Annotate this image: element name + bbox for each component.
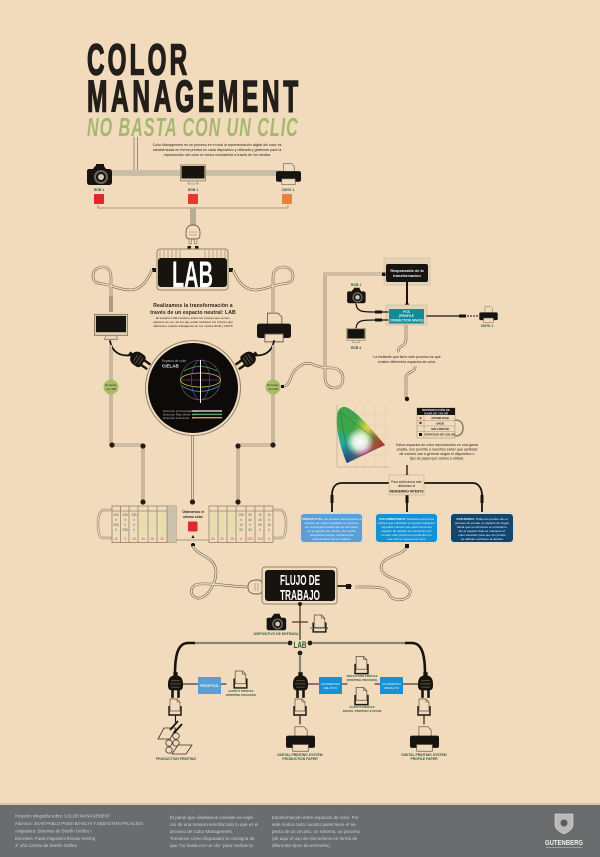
rendering intent selector: [330, 465, 484, 512]
intent boxes in workflow: RELATIVO: [324, 686, 338, 690]
right data table: 0: [259, 528, 261, 532]
intent cards: [299, 512, 515, 544]
intent cards: Aquellos colores que están fuera del: [381, 525, 432, 529]
logo: Gutenberg: [545, 814, 583, 848]
color table: ADOBE RGB: [431, 416, 449, 420]
color table: ESPACIOS DE COLOR: [425, 432, 456, 436]
title: COLOR: [87, 35, 187, 84]
footer: Docentes: Paula Pagannini Renate Herring: [15, 836, 96, 841]
LAB explanation: [150, 303, 236, 328]
left data table: [98, 506, 176, 542]
PCS box with connections: RGB 1: [351, 283, 361, 287]
right data table: 0: [240, 518, 242, 522]
CIELAB circle: CIELAB: [162, 364, 180, 368]
left data table: 25: [150, 537, 154, 541]
cables from LAB: [93, 267, 293, 312]
CIELAB circle: Dirección Azul-Amar. · b: [163, 416, 194, 420]
right data table: 5: [268, 518, 270, 522]
left data table: 0: [115, 528, 117, 532]
right data table: 12: [258, 513, 262, 517]
color table: REPRODUCCIÓN DE: [422, 407, 450, 412]
intent cards: proporciones de los colores: [313, 537, 351, 541]
footer: Alumnos: JUAN PABLO PASSI BIANCHI Y SEBASTIÁN PALACIOS: [15, 821, 143, 826]
footer: que "no basta con un clic" para realizar la: [170, 843, 253, 848]
output profiles: OUTPUT PROFILE: [228, 689, 254, 693]
intent boxes in workflow: COLORIMETRICO: [321, 682, 341, 686]
intent cards: ese mismo espacio de color: [387, 537, 426, 541]
gamut explanation: de colores van a generar según el dispositivo o: [399, 452, 475, 456]
intent cards: SATURADO: Todos los puntos. En el: [456, 517, 508, 521]
footer: transformación entre espacios de color. Por: [272, 815, 359, 820]
icon: printing press: [158, 721, 192, 754]
title: NO BASTA CON UN CLIC: [87, 112, 298, 142]
right data table: 50: [211, 537, 215, 541]
left data table: 10: [114, 537, 118, 541]
right data table: 100: [257, 537, 263, 541]
LAB explanation: capaces de ver, de los que están incluidos los colores que: [153, 320, 233, 324]
footer: pecto de un circuito, un sistema, un proceso: [272, 829, 361, 834]
footer: car de una manera sencilla todo lo que es el: [170, 822, 258, 827]
right data table: 0: [268, 528, 270, 532]
left data table: 0: [133, 528, 135, 532]
intent cards: espacio de destino se convierten por: [381, 529, 432, 533]
CIELAB circle: [146, 340, 240, 436]
right data table: 10: [267, 513, 271, 517]
workflow cables: [191, 543, 410, 600]
output paths: DIGITAL PRINTING SYSTEM: [401, 753, 447, 757]
LAB explanation: través de un espacio neutral: LAB: [150, 310, 236, 316]
right data table: 30: [248, 528, 252, 532]
LAB hub and cables: LAB: [294, 640, 307, 650]
intro text: caracterizada en forma precisa en cada dispositivo y utilizada y gestionar para la: [153, 148, 281, 152]
right data table: 25: [230, 537, 234, 541]
footer: este motivo todo nuestro panel tiene el as-: [272, 822, 357, 827]
output profiles: [226, 656, 382, 713]
intent cards: espacio de origen mediante un proceso: [304, 521, 359, 525]
intent cards: colores que coinciden en ambos espacios.: [377, 521, 436, 525]
color table: GAMA DE COLOR: [424, 412, 448, 416]
left data table: 255: [122, 513, 128, 517]
intent boxes in workflow: ABSOLUTO: [384, 686, 400, 690]
footer: Asignatura: Sistemas de Diseño Gráfico I: [15, 828, 92, 834]
LAB box: [152, 249, 233, 295]
output profiles: (PRINTING PROCESS): [347, 678, 377, 682]
intent cards: se definan conforme al destino: [461, 537, 503, 541]
right diagram: Responsable box: Responsable de la: [390, 269, 425, 273]
left data table: 255: [113, 513, 119, 517]
output paths: DIGITAL PRINTING SYSTEM: [277, 753, 323, 757]
right data table: 5: [249, 523, 251, 527]
center result: mismo color: [183, 515, 204, 519]
CIELAB circle: Dirección Rojo-Verde · a: [163, 412, 195, 416]
center result: [176, 510, 209, 547]
top cable with devices: RGB 1: [94, 188, 104, 192]
output paths: PRODUCTION PAPER: [282, 757, 318, 761]
PCS box with connections: PCS: [403, 310, 410, 314]
top cable with devices: CMYK 1: [282, 188, 295, 192]
long cable to badge: [284, 272, 386, 388]
left data table: 0: [124, 523, 126, 527]
footer: proceso de Color Management.: [170, 829, 233, 834]
intent cards: color saturado para que los puntos: [458, 533, 506, 537]
intent boxes in workflow: PERCEPTUAL: [200, 684, 219, 688]
output profiles: SIMULATION PROFILE: [346, 674, 378, 678]
color table: SIN CONTAR: [431, 427, 450, 431]
intro text: Color Management es un proceso en el cual la representación digital del color es: [153, 143, 282, 147]
right diagram: Responsable box: [384, 258, 430, 285]
right data table: 0: [240, 537, 242, 541]
right data table: 10: [239, 523, 243, 527]
right data table: [209, 506, 286, 542]
vertical connectors with dots: [109, 345, 276, 505]
gamut explanation: amplia, nos permite a nosotros saber qué cantidad: [397, 448, 477, 452]
intent cards: COLORIMÉTRICO: Relaciona todos los: [379, 516, 435, 521]
intent cards: en el espacio de destino. Es usado: [308, 529, 356, 533]
top cable with devices: RGB 1: [188, 188, 198, 192]
right data table: 15: [267, 523, 271, 527]
intro text: reproducción del color en forma consistente a través de los medios: [164, 153, 271, 157]
footer: El panel que diseñamos consiste en expli-: [170, 815, 255, 820]
left data table: 255: [122, 528, 128, 532]
footer: [0, 803, 600, 857]
gamut explanation: [396, 443, 478, 460]
output paths: [156, 699, 447, 761]
output paths: PROFILE PAPER: [410, 757, 438, 761]
workflow inputs: DISPOSITIVO DE ENTRADA: [254, 632, 299, 636]
PCS box with connections: CONNECTION SPACE): [389, 318, 424, 322]
LAB box: LAB: [172, 254, 213, 295]
green badges: de LAB: [268, 387, 278, 391]
workflow inputs: PROFILE RGB: [311, 626, 328, 630]
FLUJO DE TRABAJO box: [262, 567, 337, 604]
intent cards: de compresión hasta que se introduce: [305, 525, 358, 529]
intent cards: fotografías porque mantiene las: [310, 533, 354, 537]
intent cards: hasta que se introduce en el destino.: [457, 525, 507, 529]
intent boxes in workflow: [182, 677, 418, 694]
LAB explanation: Realizamos la transformación a: [153, 303, 233, 309]
green badges: de LAB: [106, 387, 116, 391]
CIELAB circle: Dirección Luminosidad · L: [163, 409, 197, 413]
top cable with devices: [87, 137, 301, 250]
right diagram: Responsable box: transformación: [393, 274, 421, 278]
left data table: 10: [132, 537, 136, 541]
footer: 3° año Carrera de Diseño Gráfico: [15, 843, 78, 848]
output profiles: OUTPUT PROFILE: [349, 705, 375, 709]
intent cards: proceso de escala, el espacio de origen: [455, 521, 510, 525]
workflow inputs: [254, 602, 328, 640]
right data table: 90: [239, 528, 243, 532]
FLUJO DE TRABAJO box: TRABAJO: [280, 587, 320, 604]
right data table: 0: [268, 537, 270, 541]
CIELAB circle: Espacio de color: [162, 359, 187, 363]
color table: sRGB: [436, 422, 444, 426]
logo: Gutenberg: GUTENBERG: [545, 838, 583, 847]
LAB explanation: El espacio LAB contiene todos los colores que somos: [156, 316, 230, 320]
footer: (de aquí el uso de microchess en forma de: [272, 836, 358, 841]
output profiles: (PRINTING PROCESS): [226, 693, 256, 697]
green badges: [104, 380, 284, 394]
intent cards: En el espacio final se mantiene el: [459, 529, 505, 533]
PCS box with connections: CMYK 1: [481, 324, 494, 328]
intro text: [153, 143, 282, 157]
left data table: 0: [115, 518, 117, 522]
left data table: 25: [160, 537, 164, 541]
intent cards: el color más próximo reproducible en: [381, 533, 432, 537]
limitation text and cable: [373, 325, 441, 401]
PCS box with connections: (PROFILE: [399, 314, 414, 318]
green badges: El través: [106, 383, 117, 387]
footer: Proyecto infografía sobre: COLOR MANAGEMENT: [15, 814, 111, 818]
devices beside LAB: [95, 313, 291, 373]
footer: diferentes tipos de enchufes).: [272, 843, 331, 848]
right data table: 100: [247, 537, 253, 541]
rendering intent selector: utilizamos el: [398, 484, 416, 488]
gamut explanation: tipo de papel que vamos a utilizar.: [410, 456, 464, 460]
limitation text and cable: existen diferentes espacios de color.: [378, 360, 436, 364]
left data table: 255: [113, 523, 119, 527]
green badges: El través: [268, 383, 279, 387]
left data table: 0: [124, 537, 126, 541]
title: [87, 35, 298, 142]
gamut chart: [336, 405, 390, 468]
color table: [417, 407, 463, 438]
FLUJO DE TRABAJO box: FLUJO DE: [280, 572, 320, 589]
right data table: 25: [220, 537, 224, 541]
LAB hub and cables: [168, 640, 433, 698]
left data table: 0: [133, 523, 135, 527]
LAB explanation: utilizamos cuando trabajamos en los modos RGB y CMYK: [153, 324, 234, 328]
left data table: 255: [131, 513, 137, 517]
left data table: 50: [141, 537, 145, 541]
left data table: 0: [133, 518, 135, 522]
PCS box with connections: RGB 3: [351, 346, 361, 350]
right data table: 45: [248, 518, 252, 522]
footer: Tomamos como disparador la consigna de: [170, 836, 255, 841]
right data table: 15: [258, 518, 262, 522]
limitation text and cable: La limitante que tiene este proceso es que: [373, 355, 441, 359]
center result: Obtenemos el: [182, 510, 204, 514]
left data table: 0: [124, 518, 126, 522]
right data table: 255: [238, 513, 244, 517]
output profiles: DIGITAL PRINTING SYSTEM: [343, 709, 382, 713]
title: MANAGEMENT: [87, 71, 298, 121]
output paths: PRODUCTION PRINTING: [156, 757, 196, 761]
right data table: 60: [258, 523, 262, 527]
rendering intent selector: RENDERING INTENTS: [390, 490, 423, 494]
rendering intent selector: Para seleccionar este: [391, 480, 422, 484]
right data table: 50: [248, 513, 252, 517]
intent cards: PERCEPTUAL: se produce directamente a: [302, 517, 362, 521]
intent boxes in workflow: COLORIMETRICO: [382, 682, 402, 686]
PCS box with connections: [347, 282, 498, 350]
gamut explanation: Estos espacios de color reproducidos en una gama: [396, 443, 478, 447]
